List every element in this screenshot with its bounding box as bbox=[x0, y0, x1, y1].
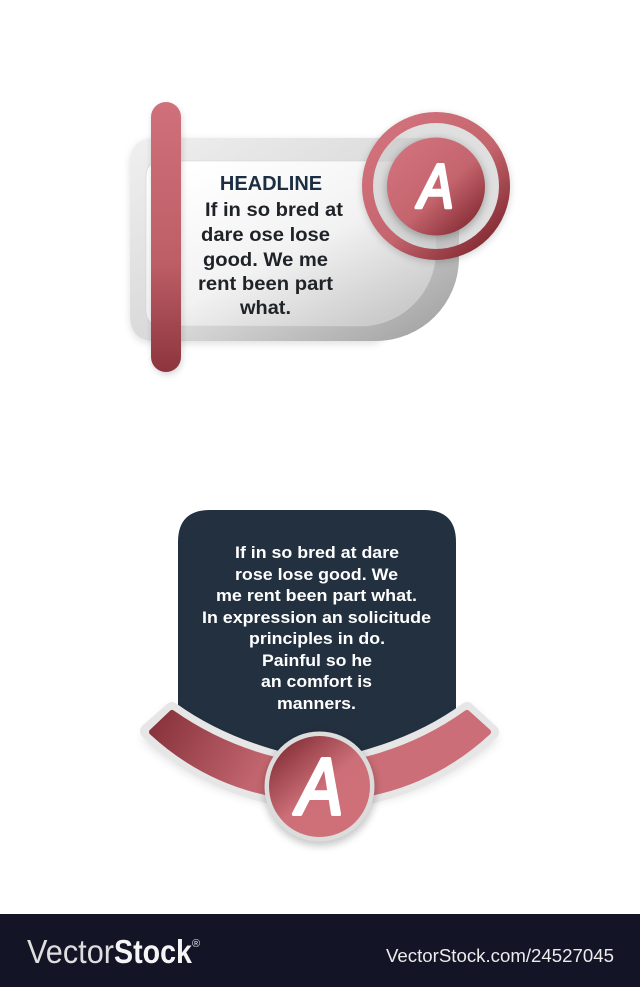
left vertical bar bbox=[151, 102, 181, 374]
card outer grey shape bbox=[130, 138, 459, 341]
body text: If in so bred at bbox=[205, 200, 344, 221]
panel text bbox=[202, 544, 431, 713]
image id: VectorStock.com/24527045 bbox=[386, 946, 614, 966]
body text: rent been part bbox=[198, 274, 334, 295]
logo: Vector: Vector bbox=[27, 933, 114, 970]
panel text: Painful so he bbox=[262, 652, 372, 670]
panel text: In expression an solicitude bbox=[202, 609, 431, 627]
body text bbox=[198, 200, 344, 319]
badge: letter A bbox=[264, 732, 376, 846]
panel text: principles in do. bbox=[249, 630, 385, 648]
badge: letter A with ring bbox=[362, 114, 510, 262]
graphic: headline card bbox=[130, 102, 510, 374]
graphic: dark text card with ribbon bbox=[143, 510, 497, 846]
panel text: an comfort is bbox=[261, 673, 372, 691]
body text: what. bbox=[239, 298, 291, 319]
logo: Stock: Stock bbox=[114, 933, 193, 970]
panel text: If in so bred at dare bbox=[235, 544, 399, 562]
card inner white panel bbox=[146, 161, 436, 326]
ribbon light border bbox=[147, 709, 492, 800]
badge: letter A: A bbox=[294, 742, 343, 831]
footer bar bbox=[0, 914, 640, 987]
dark panel bbox=[178, 510, 456, 775]
panel text: me rent been part what. bbox=[216, 587, 417, 605]
headline: HEADLINE bbox=[220, 173, 322, 195]
ribbon right segment bbox=[365, 713, 488, 794]
body text: dare ose lose bbox=[201, 225, 330, 246]
ribbon shadow bbox=[143, 708, 497, 800]
panel text: rose lose good. We bbox=[235, 566, 398, 584]
registered mark: ® bbox=[192, 938, 200, 950]
panel text: manners. bbox=[277, 695, 356, 713]
body text: good. We me bbox=[203, 250, 328, 271]
ribbon left segment bbox=[152, 713, 275, 794]
card outer shadow bbox=[130, 140, 412, 344]
badge: letter A with ring: A bbox=[415, 152, 454, 222]
